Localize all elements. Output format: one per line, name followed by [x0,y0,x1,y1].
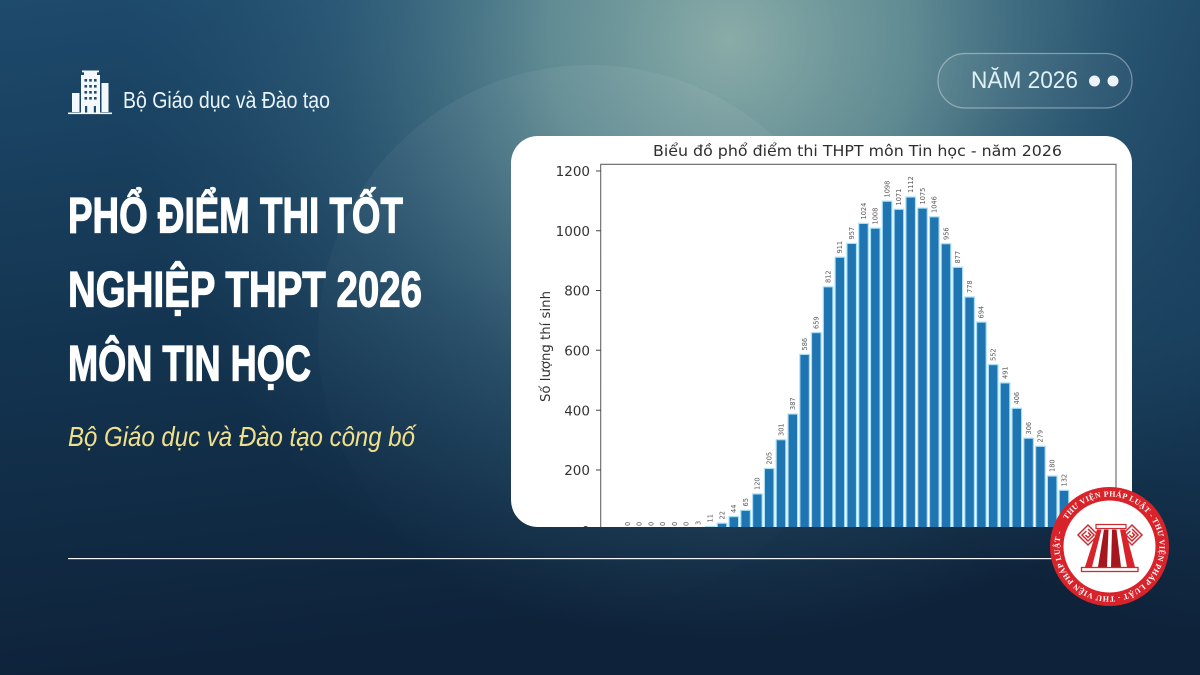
icon: right spiral [1122,525,1142,545]
y axis labels: 0 [581,524,590,540]
y axis labels: 200 [564,463,590,479]
bar value labels: 1075 [919,188,927,204]
seal: Thư Viện Pháp Luật [1050,487,1169,606]
panel: chart card [511,136,1132,540]
bar value labels: 1098 [883,181,891,198]
bar value labels: 180 [1048,459,1056,472]
bar value labels: 1071 [895,189,903,206]
title: MÔN TIN HỌC [68,334,311,392]
bar value labels: 1046 [931,196,939,213]
bar value labels: 491 [1001,366,1009,379]
title [68,186,422,392]
title: PHỔ ĐIỂM THI TỐT [68,186,403,244]
bar value labels: 1024 [860,203,868,220]
bar value labels: 22 [718,511,726,520]
bar value labels: 0 [636,522,644,526]
bar value labels: 1008 [872,208,880,224]
bar value labels: 911 [836,241,844,254]
bar value labels: 956 [942,227,950,240]
bar value labels: 1112 [907,176,915,193]
bar value labels: 0 [659,522,667,526]
y axis labels: 1200 [556,164,590,180]
bar value labels: 877 [954,251,962,264]
y axis labels: 1000 [556,224,590,240]
bar value labels [624,176,1068,526]
icon: temple column [1078,524,1142,572]
seal ring text: THƯ VIỆN PHÁP LUẬT - THƯ VIỆN PHÁP LUẬT - THƯ VIỆN PHÁP LUẬT - [1052,490,1166,602]
bar value labels: 406 [1013,392,1021,404]
bar value labels: 11 [706,514,714,522]
bar value labels: 586 [801,338,809,350]
subtitle: Bộ Giáo dục và Đào tạo công bố [68,421,417,452]
organisation name: Bộ Giáo dục và Đào tạo [123,87,330,113]
year badge [938,54,1132,108]
bar value labels: 132 [1060,474,1068,486]
bar value labels: 552 [990,348,998,361]
bar value labels: 659 [813,316,821,329]
y axis labels: 400 [564,404,590,420]
bar value labels: 0 [671,522,679,526]
y axis title: Số lượng thí sinh [537,291,554,402]
bar value labels: 0 [647,522,655,526]
bar value labels: 3 [695,521,703,525]
bar value labels: 301 [777,423,785,436]
bar value labels: 120 [754,477,762,490]
bar value labels: 279 [1037,430,1045,442]
title: NGHIỆP THPT 2026 [68,262,422,318]
year badge: NĂM 2026 [971,67,1078,94]
icon: building [68,70,112,114]
bar value labels: 694 [978,306,986,318]
y axis labels: 600 [564,344,590,360]
bar value labels: 387 [789,397,797,410]
y axis labels [556,164,590,540]
chart title: Biểu đồ phổ điểm thi THPT môn Tin học - năm 2026 [653,142,1062,160]
bar value labels: 65 [742,498,750,506]
bar value labels: 778 [966,280,974,293]
bar value labels: 0 [624,522,632,526]
bar value labels: 44 [730,505,738,513]
icon: left spiral [1078,525,1098,545]
bar value labels: 812 [824,270,832,283]
bar chart bars [694,197,1069,534]
y axis ticks [596,170,601,470]
bar value labels: 205 [766,452,774,464]
bar value labels: 306 [1025,422,1033,434]
y axis labels: 800 [564,284,590,300]
divider line [68,558,1053,559]
bar value labels: 957 [848,227,856,240]
chart axes frame [601,164,1116,530]
bar value labels: 0 [683,522,691,526]
